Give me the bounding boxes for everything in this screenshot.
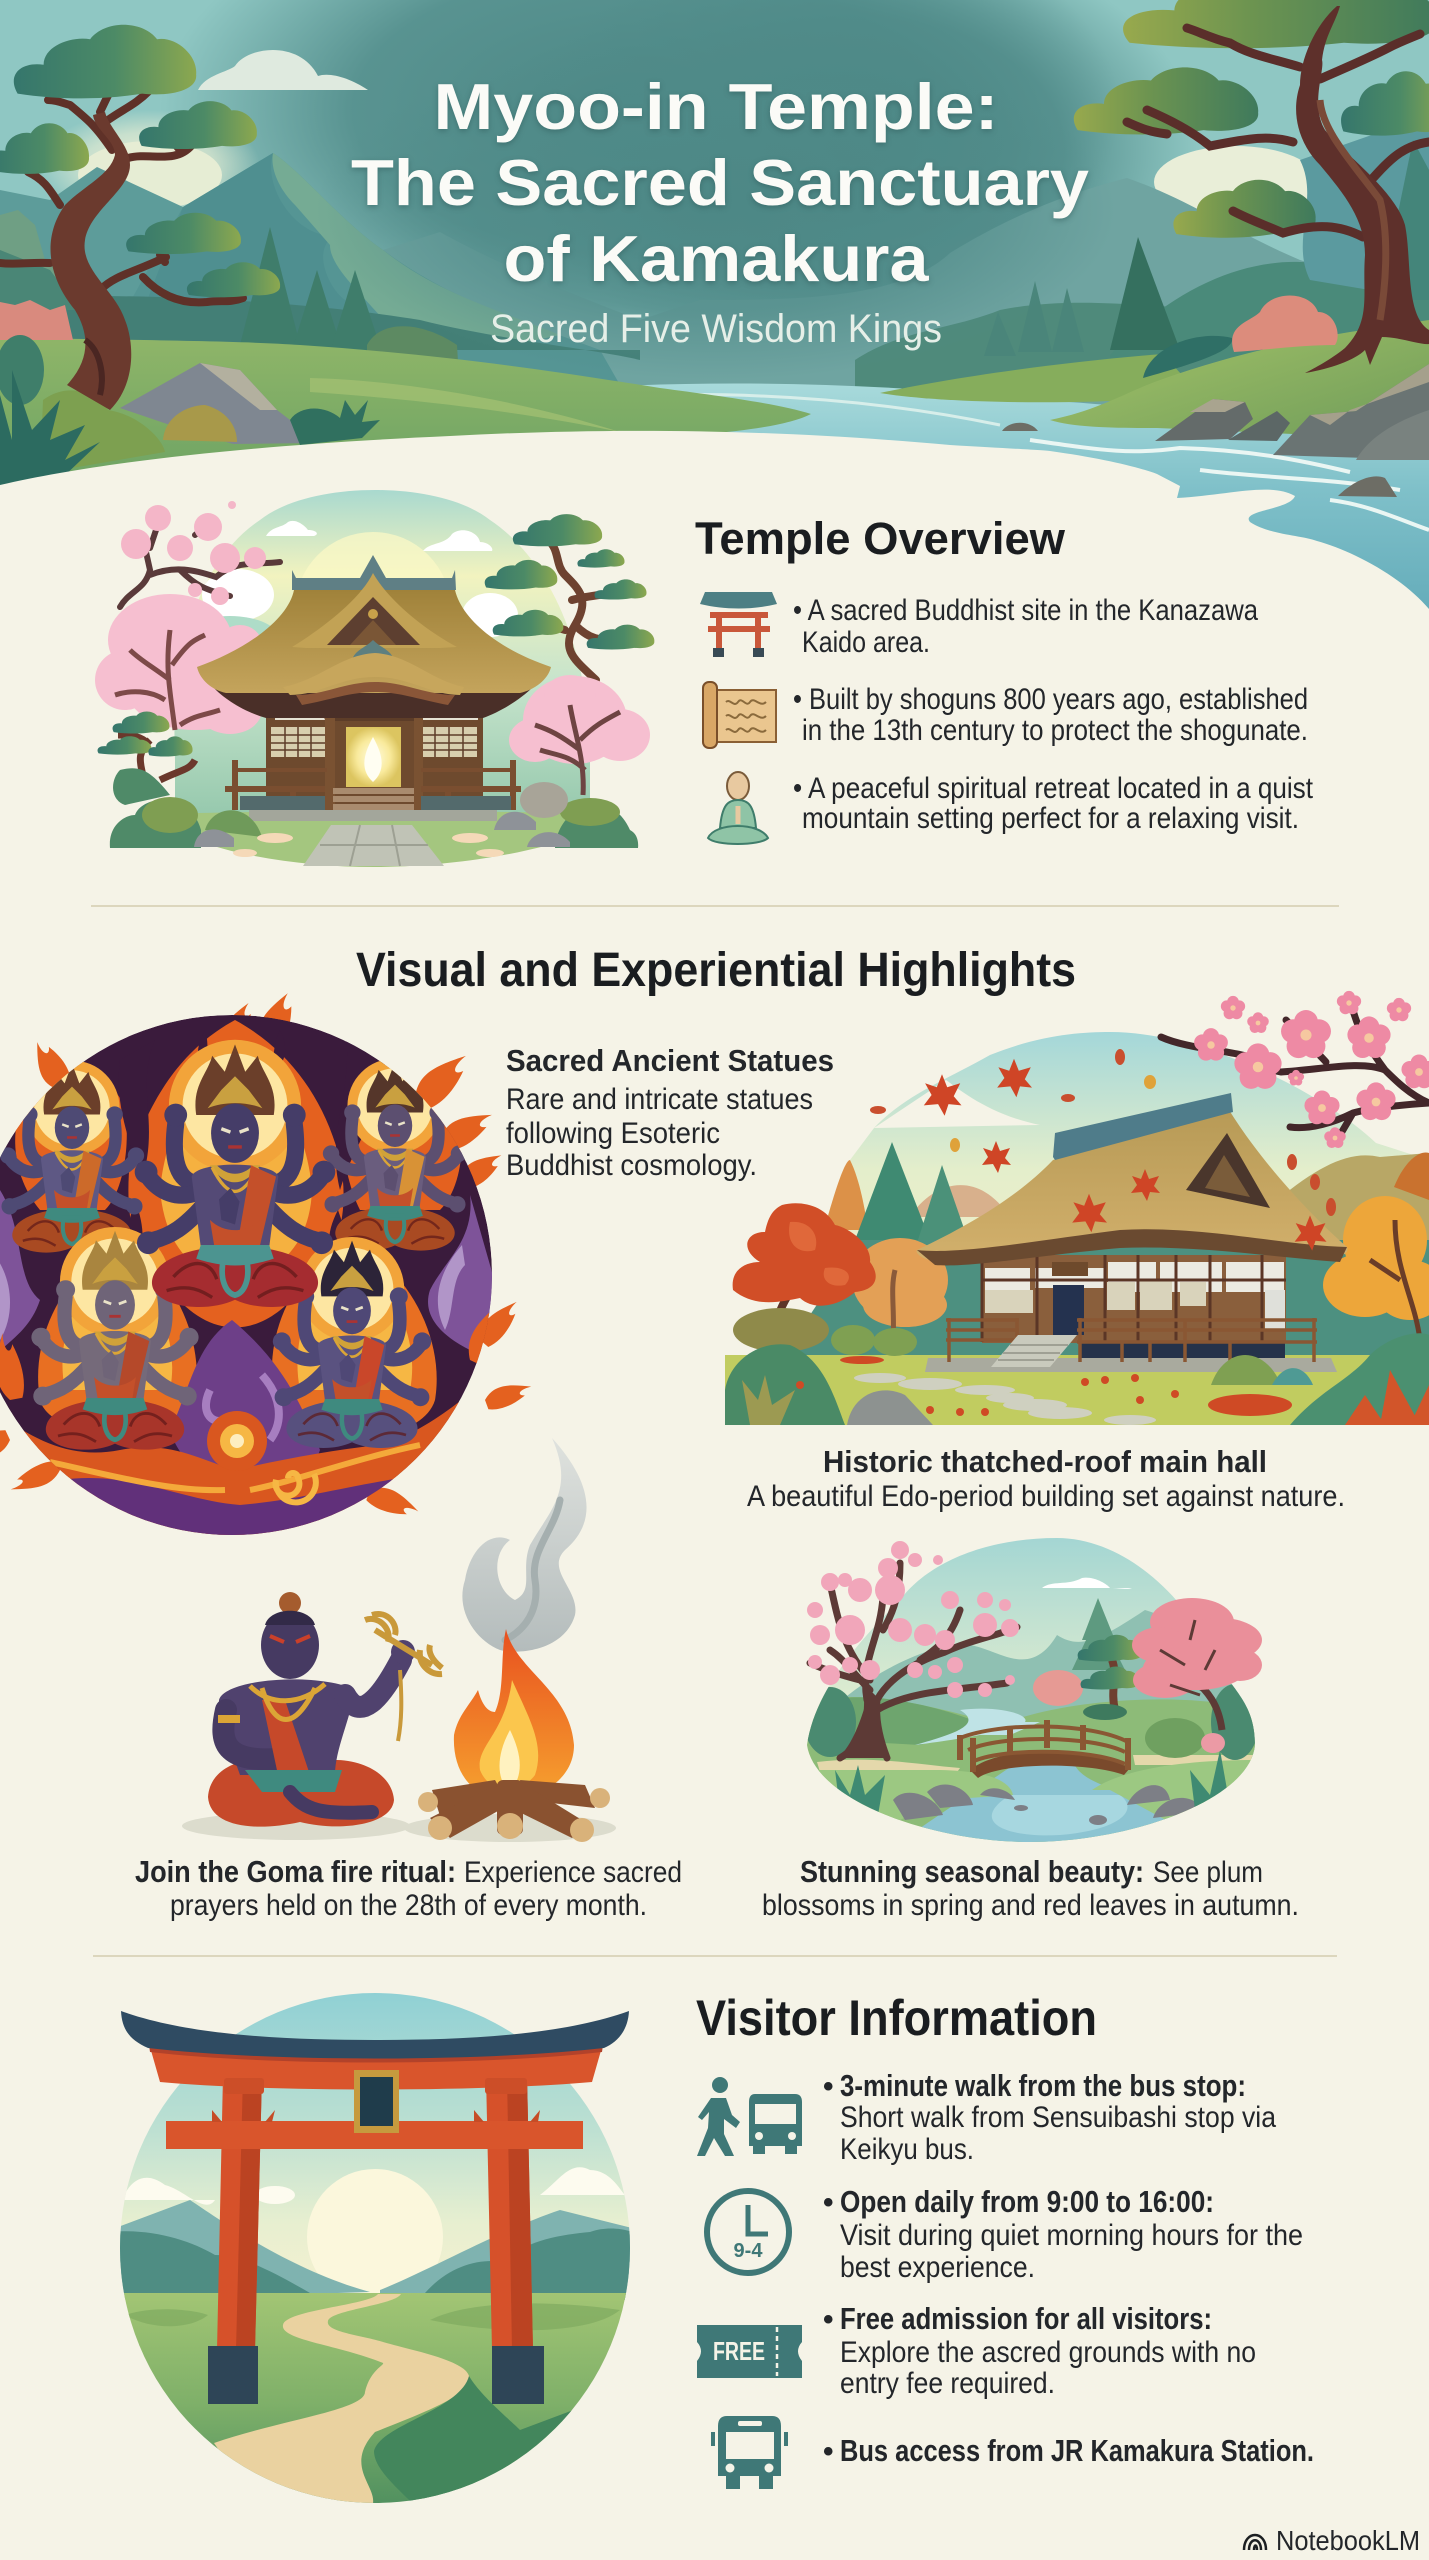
sky dome [848,1032,1412,1236]
grass tufts [835,1750,1245,1815]
plum tree [810,1563,1017,1758]
text: overview point 2: • Built by shoguns 800 years ago, established [793,683,1308,716]
left tree [0,85,243,302]
text: free admission: entry fee required. [840,2367,1055,2400]
karahafu front roof [283,653,464,695]
path [214,2294,469,2510]
river rocks [1002,423,1038,431]
text: sacred ancient statues: Buddhist cosmology. [506,1149,757,1182]
text: overview point 1 [793,594,1258,659]
icon: scroll [703,682,776,748]
right tree [1123,0,1429,48]
text: opening hours: Visit during quiet morning hours for the [840,2219,1303,2252]
gable [292,573,457,648]
right hills [880,354,1200,402]
stones [854,1373,1156,1425]
ground [150,811,620,867]
plum branch [1161,1010,1429,1135]
text: free admission [823,2301,1256,2400]
bushes [733,1308,829,1352]
pink tree right [509,675,650,764]
temple illustration [95,490,654,867]
icon: free ticket: FREE [713,2336,765,2366]
text: free admission: Free admission for all visitors: [840,2301,1212,2336]
swirl [207,1411,267,1471]
clouds [202,521,518,637]
green backdrop [780,1240,1429,1360]
icon: torii [700,592,777,657]
pink tree left [95,594,263,734]
lower fires [38,1303,196,1416]
right rocks [1155,399,1253,441]
text: goma fire ritual: Experience sacred [464,1856,682,1889]
text: sacred ancient statues [506,1043,834,1182]
rocks [893,1784,1203,1820]
fallen leaves [796,1356,1292,1416]
title haze [316,40,1116,380]
title: of Kamakura [504,222,929,295]
text: overview point 3: mountain setting perfect for a relaxing visit. [802,802,1299,835]
text: seasonal beauty: Stunning seasonal beauty: [800,1854,1144,1889]
conifers [240,227,382,352]
rocks left [120,363,320,444]
small pink and bonsai [1033,1670,1083,1706]
falling leaves [924,1059,1326,1251]
text: sacred ancient statues: Sacred Ancient Statues [506,1043,834,1078]
cloud left [198,50,368,90]
left hills [0,337,811,500]
main thatch roof [197,590,551,693]
text: sacred ancient statues: following Esoteric [506,1117,720,1150]
small pine left [118,735,195,790]
ground [725,1355,1429,1425]
text: thatched hall caption: A beautiful Edo-period building set against nature. [747,1480,1345,1513]
thatched hall illustration [725,991,1429,1425]
text: walk from bus stop [823,2068,1276,2166]
plum branch [120,520,280,607]
text: seasonal beauty: blossoms in spring and red leaves in autumn. [762,1889,1299,1922]
seated figure [208,1592,415,1827]
text: free admission: • [823,2303,834,2336]
text: walk from bus stop: Short walk from Sensuibashi stop via [840,2101,1276,2134]
title: The Sacred Sanctuary [351,146,1089,219]
text: walk from bus stop: • [823,2070,834,2103]
text: free admission: Explore the ascred grounds with no [840,2336,1256,2369]
heading: highlights: Visual and Experiential Highlights [356,944,1076,997]
spring garden illustration [804,1538,1262,1845]
icon: free ticket [697,2325,802,2378]
deity: bottom left [31,1227,199,1450]
icon: clock: 9-4 [734,2240,763,2262]
thatched roof [917,1110,1348,1260]
title [351,70,1089,295]
text: thatched hall caption: Historic thatched-roof main hall [823,1444,1267,1479]
text: overview point 1: • A sacred Buddhist site in the Kanazawa [793,594,1258,627]
dark foreground band [0,296,640,360]
ground [807,1697,1258,1845]
veranda [225,760,521,812]
text: thatched hall caption [747,1444,1345,1513]
plaque [354,2070,399,2133]
deity: bottom right [273,1237,431,1448]
curved roof cap [121,2011,629,2058]
text: opening hours: • [823,2186,834,2219]
text: opening hours [823,2184,1303,2284]
central fire [128,1020,344,1328]
text: overview point 1: Kaido area. [802,626,930,659]
icon: bus [711,2416,788,2489]
text: overview point 2 [793,683,1308,747]
smoke [462,1438,587,1652]
text: bus access: • [823,2435,834,2468]
text: walk from bus stop: Keikyu bus. [840,2133,974,2166]
subtitle: Sacred Five Wisdom Kings [490,307,942,351]
upper beam [150,2047,602,2090]
header landscape illustration [0,0,1429,620]
outer flames [0,988,535,1522]
maple [777,1300,790,1308]
text: walk from bus stop: 3-minute walk from the bus stop: [840,2068,1246,2103]
text: overview point 3: • A peaceful spiritual retreat located in a quist [793,772,1314,805]
right pine [525,540,620,680]
bottom-left foliage [0,335,44,405]
heading: visitor information: Visitor Information [696,1990,1097,2046]
left main mountain [120,153,640,420]
water [900,1760,1200,1845]
rails [946,1318,1317,1362]
bushes and rocks [110,800,201,848]
pillars [217,2075,262,2350]
purple smoke [0,1190,40,1360]
heading: temple overview: Temple Overview [695,513,1066,564]
right orange [1323,1196,1429,1320]
logs [430,1780,595,1838]
lower cross beam [166,2121,583,2149]
deity: top left [0,1060,144,1253]
icon: meditating monk [708,772,768,844]
text: goma fire ritual: prayers held on the 28th of every month. [170,1889,647,1922]
text: goma fire ritual [135,1854,682,1922]
stone path [303,825,444,866]
text: opening hours: Open daily from 9:00 to 16:00: [840,2184,1214,2219]
title: Myoo-in Temple: [434,70,998,143]
text: seasonal beauty: See plum [1153,1856,1263,1889]
goma fire ritual illustration [182,1438,616,1842]
deity: center [135,1040,335,1307]
side fires [15,1089,127,1210]
text: sacred ancient statues: Rare and intricate statues [506,1083,813,1116]
vajra [365,1614,442,1741]
text: opening hours: best experience. [840,2251,1035,2284]
orange tree [852,1238,948,1327]
statues illustration: five wisdom kings in flames [0,988,535,1560]
river base [620,384,1429,620]
text: goma fire ritual: Join the Goma fire ritual: [135,1854,456,1889]
text: overview point 3 [793,772,1314,835]
lower flame band [24,1402,459,1535]
pink tree [1165,1630,1222,1730]
veranda base [925,1358,1337,1372]
fire [454,1629,574,1800]
side flames inside [0,1295,514,1402]
deity: top right [323,1058,467,1251]
text: overview point 2: in the 13th century to protect the shogunate. [802,714,1308,747]
eaves shadow [212,686,534,718]
main building walls [266,695,483,810]
icon: clock [707,2191,789,2273]
dark flame streaks [120,1038,385,1241]
icon: walking person and bus [697,2077,802,2156]
text: seasonal beauty [762,1854,1299,1922]
steps [991,1335,1077,1367]
bridge [970,1751,1130,1778]
text: bus access: Bus access from JR Kamakura Station. [840,2433,1314,2468]
building [982,1255,1286,1343]
torii gate illustration [110,1990,640,2513]
flower [1201,1733,1225,1753]
back mountains [380,178,1429,430]
